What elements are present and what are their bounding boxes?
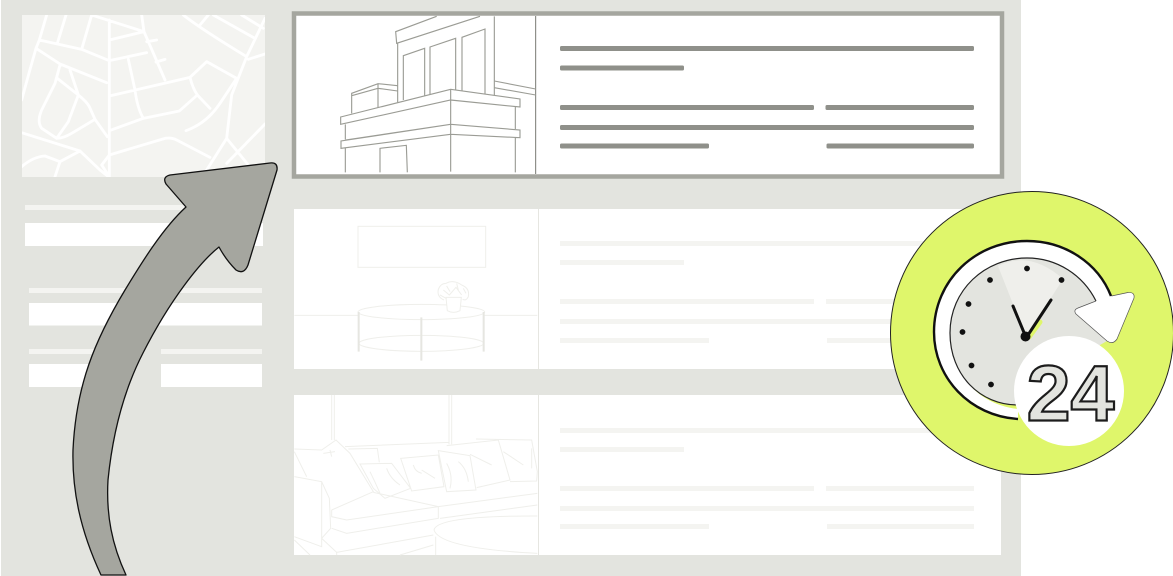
listing text lines: [560, 46, 974, 148]
number 24: 24: [1027, 348, 1114, 438]
green circle: [890, 192, 1173, 474]
listing card 2: [294, 209, 1001, 369]
hour ticks: [960, 266, 1064, 387]
arrowhead outline: [1075, 292, 1134, 343]
highlighted listing card: [294, 14, 1002, 176]
white number circle: [1014, 336, 1124, 446]
circular arrow: [934, 241, 1134, 420]
map panel: [22, 15, 265, 177]
clock face: [950, 258, 1107, 405]
table and picture line drawing: [294, 226, 537, 361]
building line drawing: [341, 16, 536, 172]
form field 3: [29, 349, 109, 387]
card divider: [538, 209, 539, 369]
card divider: [535, 16, 536, 174]
form field 2: [29, 288, 262, 326]
listing card 3: [294, 395, 1001, 555]
circular arrow outline: [934, 241, 1111, 419]
listing text lines: [560, 241, 974, 343]
clock face outline: [950, 258, 1096, 405]
clock hands: [1013, 300, 1051, 342]
form field 1: [25, 205, 263, 246]
listing form fields: [25, 205, 263, 387]
listing text lines: [560, 428, 974, 529]
card divider: [538, 395, 539, 555]
form field 4: [161, 349, 262, 387]
sofa line drawing: [294, 395, 537, 555]
clock badge: [890, 192, 1173, 474]
highlighted time wedge: [998, 260, 1063, 337]
curved arrow: [73, 163, 277, 575]
